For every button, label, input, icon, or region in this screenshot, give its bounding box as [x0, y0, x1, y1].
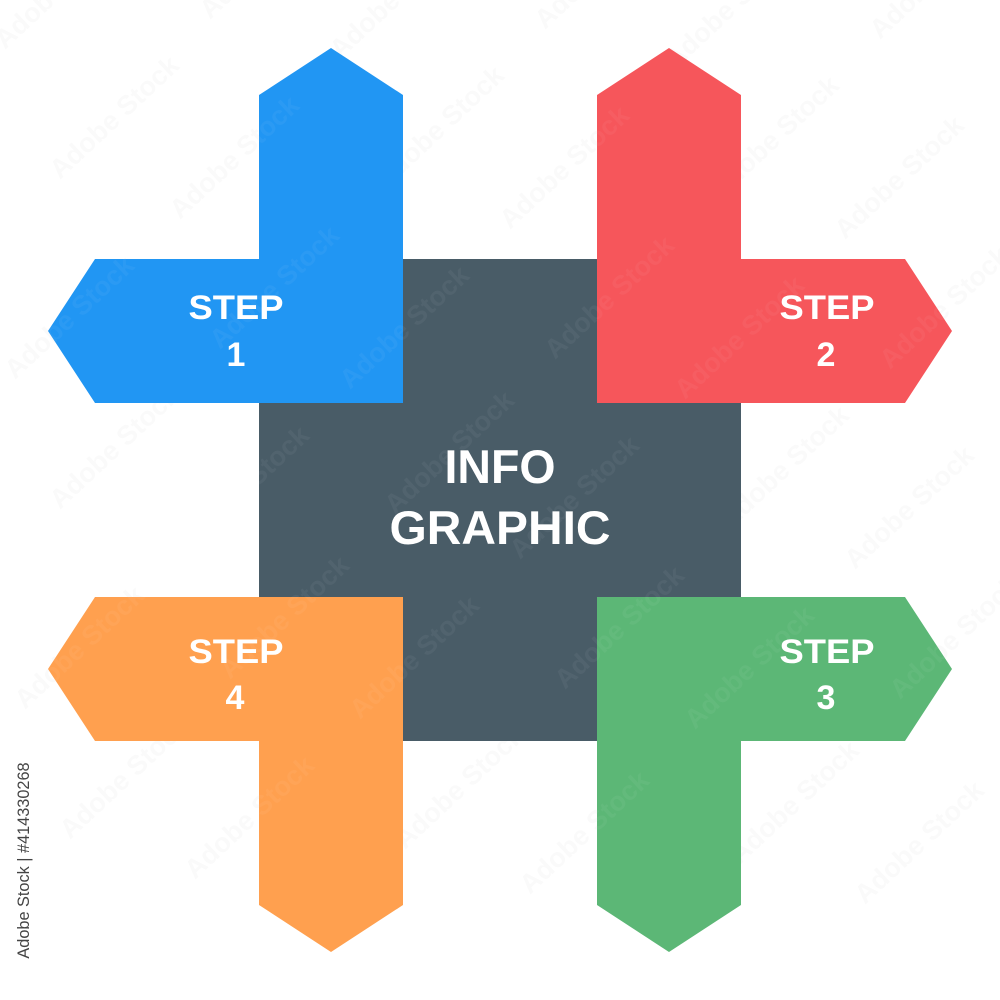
watermark on background: Adobe Stock	[44, 49, 185, 184]
watermark over shapes: Adobe Stock	[174, 419, 315, 554]
watermark on background: Adobe Stock	[839, 439, 980, 574]
step 2 label	[780, 289, 874, 374]
center title: GRAPHIC	[390, 501, 610, 554]
step 3 label: 3	[817, 679, 835, 717]
watermark over shapes: Adobe Stock	[679, 599, 820, 734]
watermark on background: Adobe Stock	[179, 749, 320, 884]
watermark over shapes: Adobe Stock	[9, 579, 150, 714]
watermark over shapes: Adobe Stock	[494, 99, 635, 234]
watermark over shapes: Adobe Stock	[204, 219, 345, 354]
watermark on background: Adobe Stock	[494, 99, 635, 234]
watermark over shapes: Adobe Stock	[334, 259, 475, 394]
watermark on background: Adobe Stock	[849, 774, 990, 909]
watermark on background: Adobe Stock	[704, 69, 845, 204]
watermark over shapes: Adobe Stock	[379, 384, 520, 519]
watermark over shapes: Adobe Stock	[539, 229, 680, 364]
stock id label: Adobe Stock | #414330268	[15, 762, 33, 959]
step 1 label	[188, 289, 284, 374]
watermark over shapes: Adobe Stock	[504, 429, 645, 564]
step 2 label: STEP	[780, 289, 874, 327]
step 4 label	[188, 633, 284, 717]
center square	[259, 259, 741, 741]
watermark over shapes: Adobe Stock	[514, 764, 655, 899]
step 4 label: 4	[226, 679, 245, 717]
watermark over shapes: Adobe Stock	[179, 749, 320, 884]
center title: INFO	[444, 440, 556, 493]
watermark on background: Adobe Stock	[44, 379, 185, 514]
watermark over shapes: Adobe Stock	[214, 549, 355, 684]
step 1 label: STEP	[188, 289, 284, 327]
watermark on background: Adobe Stock	[714, 399, 855, 534]
watermark on background: Adobe Stock	[669, 269, 810, 404]
step 3 arrow shape	[597, 597, 952, 952]
watermark over shapes: Adobe Stock	[669, 269, 810, 404]
step 1 label: 1	[227, 336, 245, 374]
step 2 label: 2	[817, 336, 835, 374]
watermark on background: Adobe Stock	[829, 109, 970, 244]
watermark over shapes: Adobe Stock	[0, 249, 140, 384]
watermark on background: Adobe Stock	[389, 719, 530, 854]
step 2 arrow shape	[597, 48, 952, 403]
step 3 label: STEP	[780, 633, 874, 671]
watermark over shapes: Adobe Stock	[164, 89, 305, 224]
watermark on background: Adobe Stock	[9, 579, 150, 714]
watermark on background: Adobe Stock	[514, 764, 655, 899]
step 3 label	[780, 633, 874, 717]
watermark on background: Adobe Stock	[164, 89, 305, 224]
watermark over shapes: Adobe Stock	[549, 559, 690, 694]
step 4 arrow shape	[48, 597, 403, 952]
watermark on background: Adobe Stock	[54, 709, 195, 844]
step 4 label: STEP	[188, 633, 284, 671]
watermark on background: Adobe Stock	[369, 59, 510, 194]
step 1 arrow shape	[48, 48, 403, 403]
watermark on background: Adobe Stock	[724, 734, 865, 869]
watermark over shapes: Adobe Stock	[344, 589, 485, 724]
center title	[390, 440, 610, 554]
watermark on background: Adobe Stock	[0, 249, 140, 384]
